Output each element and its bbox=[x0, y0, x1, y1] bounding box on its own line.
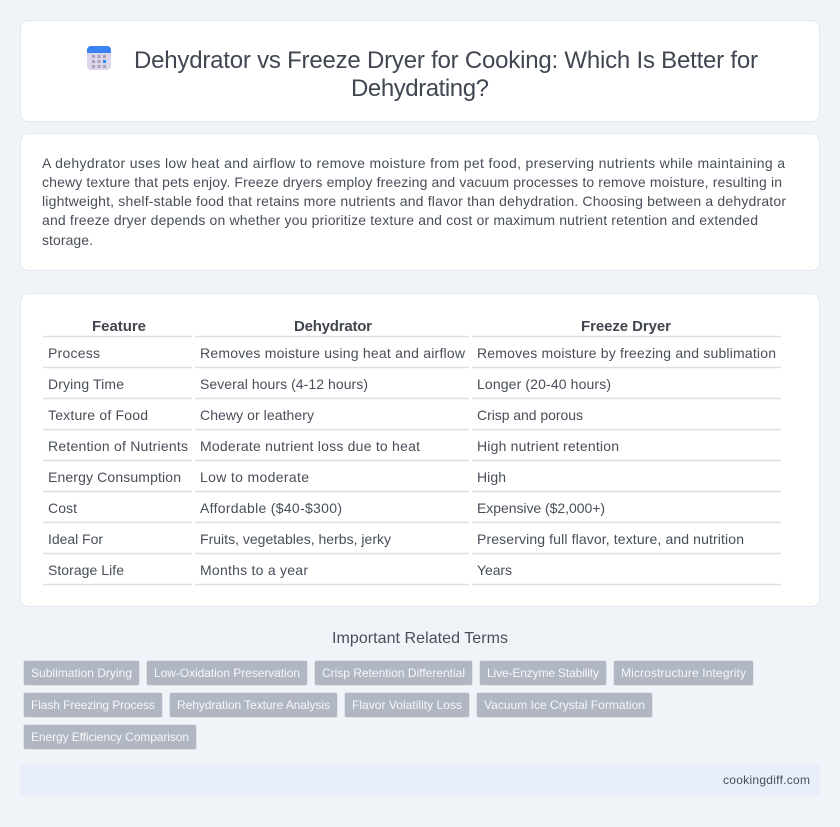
table row: drying time bbox=[48, 376, 611, 392]
tag: Sublimation Drying bbox=[31, 666, 132, 680]
text block: summary bbox=[42, 155, 786, 248]
footer bbox=[20, 763, 820, 797]
tag bbox=[314, 660, 472, 686]
panel: title header bbox=[20, 20, 820, 122]
table row: process bbox=[48, 345, 776, 361]
table row: drying time: Longer (20-40 hours) bbox=[477, 376, 611, 392]
table header row: Freeze Dryer bbox=[581, 318, 671, 335]
table row: drying time: Drying Time bbox=[48, 376, 124, 392]
text block: summary: storage. bbox=[42, 232, 93, 248]
table row: process: Removes moisture by freezing and sublimation bbox=[477, 345, 776, 361]
title: Dehydrator vs Freeze Dryer for Cooking: Which Is Better for bbox=[134, 47, 758, 74]
table row: texture: Chewy or leathery bbox=[200, 407, 314, 423]
text block: summary: and freeze dryer depends on whether you prioritize texture and cost or maximum nutrient retention and extended bbox=[42, 212, 758, 228]
table row: ideal for: Preserving full flavor, texture, and nutrition bbox=[477, 531, 744, 547]
tag bbox=[24, 724, 196, 750]
title bbox=[134, 47, 758, 102]
tag: Flavor Volatility Loss bbox=[352, 698, 462, 712]
tag bbox=[344, 692, 470, 718]
tag: Crisp Retention Differential bbox=[322, 666, 465, 680]
table row: texture: Texture of Food bbox=[48, 407, 148, 423]
table row: nutrients: Moderate nutrient loss due to heat bbox=[200, 438, 420, 454]
tag: Flash Freezing Process bbox=[31, 698, 155, 712]
title: Dehydrating? bbox=[351, 75, 489, 102]
table header row: Feature bbox=[92, 318, 146, 335]
tag: Vacuum Ice Crystal Formation bbox=[484, 698, 645, 712]
table row: ideal for: Ideal For bbox=[48, 531, 103, 547]
table row: nutrients bbox=[48, 438, 619, 454]
table row: cost bbox=[48, 500, 605, 516]
table row: storage life: Years bbox=[477, 562, 512, 578]
table row: texture: Crisp and porous bbox=[477, 407, 583, 423]
table header row bbox=[92, 318, 671, 335]
text block: summary: A dehydrator uses low heat and airflow to remove moisture from pet food, preserving nutrients while maintaining a bbox=[42, 155, 785, 171]
table row: energy: Energy Consumption bbox=[48, 469, 181, 485]
table row: storage life: Months to a year bbox=[200, 562, 308, 578]
table row: nutrients: Retention of Nutrients bbox=[48, 438, 188, 454]
tag bbox=[146, 660, 308, 686]
tag: Low-Oxidation Preservation bbox=[154, 666, 300, 680]
table row: process: Process bbox=[48, 345, 100, 361]
table row: energy: High bbox=[477, 469, 506, 485]
table row: process: Removes moisture using heat and airflow bbox=[200, 345, 466, 361]
table row: ideal for: Fruits, vegetables, herbs, jerky bbox=[200, 531, 391, 547]
tag bbox=[614, 660, 754, 686]
text block: summary: lightweight, shelf-stable food that retains more nutrients and flavor than dehydration. Choosing between a dehydrator bbox=[42, 193, 786, 209]
table row: cost: Cost bbox=[48, 500, 77, 516]
table row: nutrients: High nutrient retention bbox=[477, 438, 619, 454]
tag bbox=[24, 660, 140, 686]
tag bbox=[24, 692, 162, 718]
table row: ideal for bbox=[48, 531, 744, 547]
tag: Microstructure Integrity bbox=[621, 666, 746, 680]
table row: storage life: Storage Life bbox=[48, 562, 124, 578]
table row: texture bbox=[48, 407, 583, 423]
tag: Rehydration Texture Analysis bbox=[177, 698, 330, 712]
table row: drying time: Several hours (4-12 hours) bbox=[200, 376, 368, 392]
table row: cost: Affordable ($40-$300) bbox=[200, 500, 342, 516]
footer source text: cookingdiff.com bbox=[723, 773, 810, 787]
table row: cost: Expensive ($2,000+) bbox=[477, 500, 605, 516]
table row: energy bbox=[48, 469, 506, 485]
tag list: related terms bbox=[24, 660, 754, 750]
table header row: Dehydrator bbox=[294, 318, 372, 335]
icon: calendar bbox=[87, 46, 111, 70]
table row: energy: Low to moderate bbox=[200, 469, 309, 485]
tag: Live-Enzyme Stability bbox=[487, 666, 599, 680]
text block: summary: chewy texture that pets enjoy. Freeze dryers employ freezing and vacuum processes to remove moisture, resulting in bbox=[42, 174, 782, 190]
tag bbox=[476, 692, 652, 718]
tag bbox=[170, 692, 338, 718]
tag bbox=[480, 660, 606, 686]
table row: storage life bbox=[48, 562, 512, 578]
tag: Energy Efficiency Comparison bbox=[31, 730, 189, 744]
panel: summary paragraph bbox=[20, 134, 820, 270]
heading: important related terms: Important Related Terms bbox=[332, 630, 508, 647]
panel: comparison table bbox=[20, 294, 820, 606]
